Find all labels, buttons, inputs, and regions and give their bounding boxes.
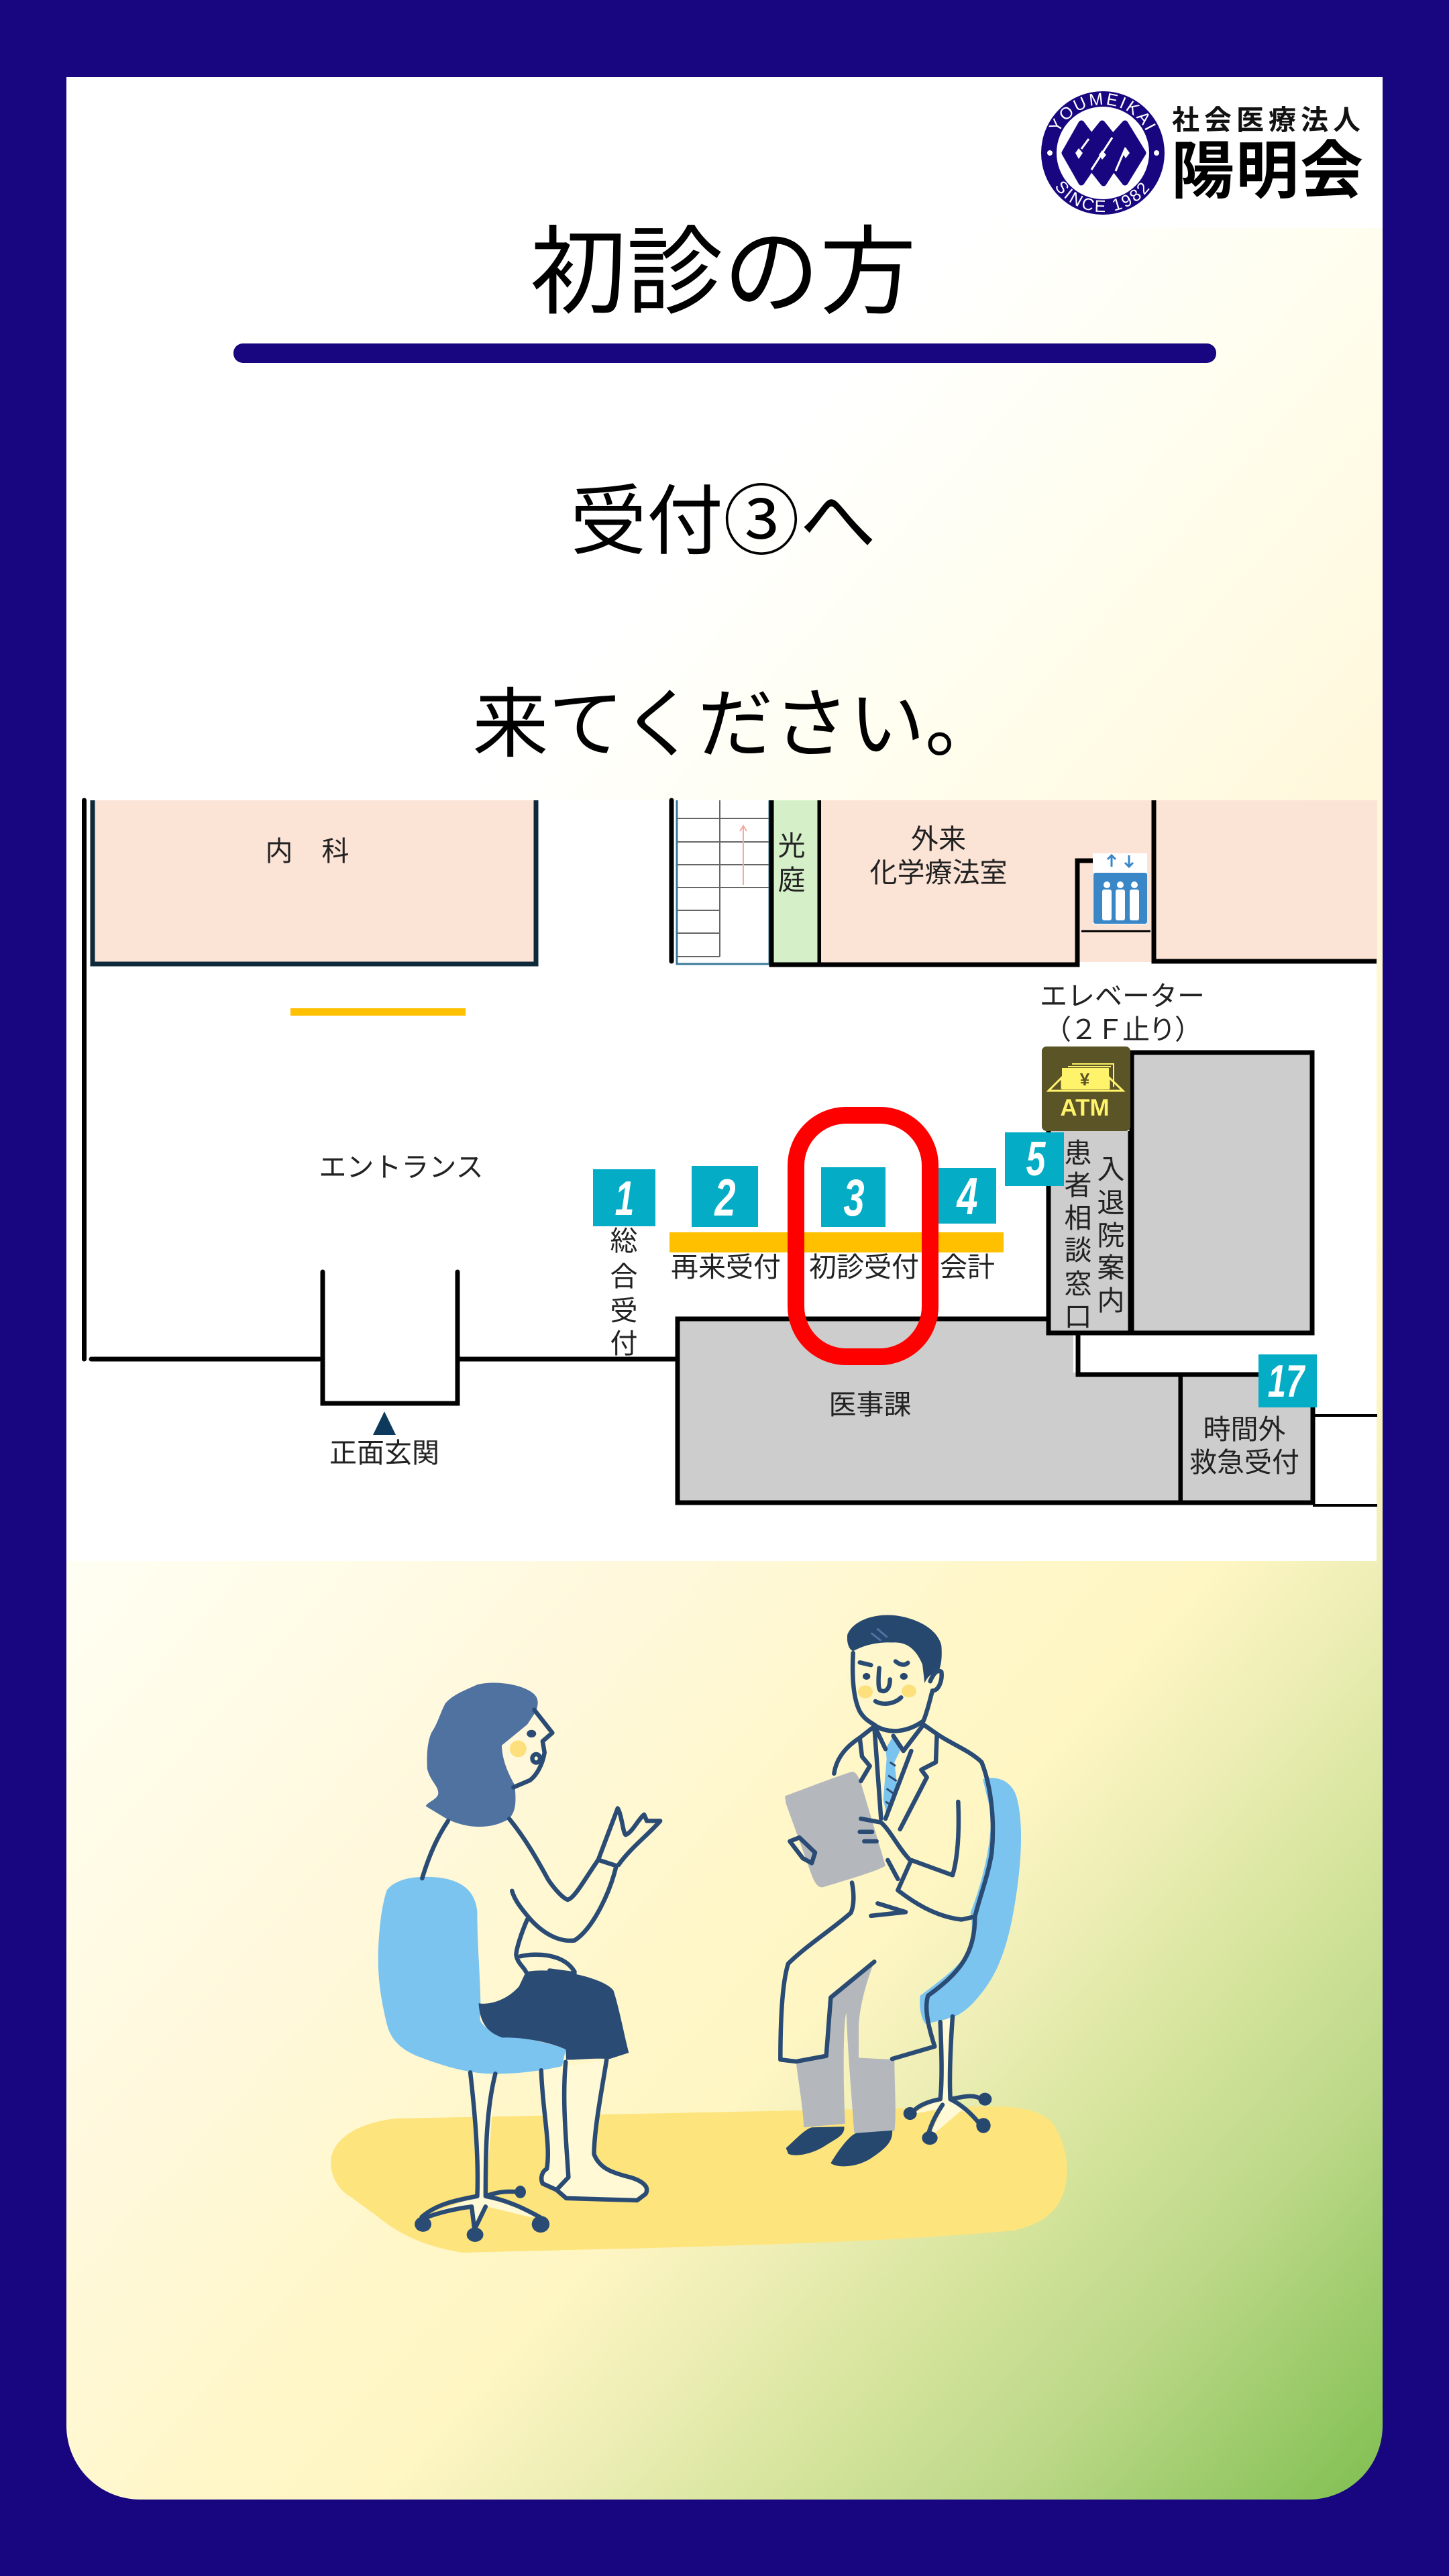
logo backing xyxy=(1006,77,1383,228)
label: 総合受付: 合 xyxy=(610,1261,637,1292)
doctor tie stripes xyxy=(885,1762,897,1805)
room: 入退院案内 / 患者相談窓口: 談 xyxy=(1064,1235,1092,1266)
label: 会計: 会計 xyxy=(940,1252,995,1283)
doctor shoes xyxy=(786,2127,892,2166)
doctor clipboard xyxy=(785,1772,885,1887)
label: 正面玄関: 正面玄関 xyxy=(329,1438,439,1468)
floor map panel xyxy=(66,800,1377,1561)
badge 3: 3 xyxy=(843,1169,865,1227)
doctor chair casters xyxy=(904,2093,991,2145)
woman outlines xyxy=(422,1710,660,2230)
doctor trousers xyxy=(796,1962,896,2133)
icon: ATM: ATM xyxy=(1060,1095,1110,1121)
woman skirt xyxy=(478,1970,629,2060)
woman cheek xyxy=(510,1740,527,1757)
label: 初診受付: 初診受付 xyxy=(809,1252,919,1283)
logo: Youmeikai xyxy=(1041,91,1365,215)
highlight: red ring around reception 3 xyxy=(796,1115,930,1356)
room: 時間外救急受付 xyxy=(678,1333,1377,1505)
room: 入退院案内 / 患者相談窓口: 窓 xyxy=(1064,1269,1092,1299)
badge 2: 2 xyxy=(714,1169,736,1227)
badge 2 xyxy=(692,1166,758,1227)
logo emblem xyxy=(1041,91,1165,215)
icon: elevator xyxy=(1093,853,1147,924)
instruction text line 2: 来てください。 xyxy=(472,682,1001,767)
room: 入退院案内 / 患者相談窓口 xyxy=(1049,1131,1130,1333)
stairs xyxy=(672,800,769,964)
room: 入退院案内 / 患者相談窓口: 口 xyxy=(1064,1301,1092,1332)
logo text: organisation type: 社会医療法人 xyxy=(1172,105,1365,136)
badge 4 xyxy=(938,1167,996,1226)
room: 入退院案内 / 患者相談窓口: 内 xyxy=(1097,1285,1124,1316)
woman chair xyxy=(378,1877,566,2074)
doctor tie xyxy=(883,1736,900,1819)
room: 光庭: 光 xyxy=(778,830,805,861)
room: 入退院案内 / 患者相談窓口: 相 xyxy=(1064,1203,1092,1234)
room: grey block xyxy=(1132,1053,1312,1333)
illustration: doctor xyxy=(780,1615,1021,2166)
badge 3 xyxy=(821,1167,885,1227)
woman hair xyxy=(426,1682,538,1827)
woman chair legs fill xyxy=(422,2072,540,2236)
label: エレベーター xyxy=(1040,981,1205,1045)
logo emblem: YOUMEIKAI xyxy=(1049,93,1156,130)
room: 入退院案内 / 患者相談窓口: 者 xyxy=(1064,1170,1092,1201)
badge 17 xyxy=(1258,1354,1317,1407)
woman legs fill xyxy=(541,2060,647,2200)
room: 外来化学療法室 and elevator hall xyxy=(820,800,1377,965)
room: 時間外救急受付: 救急受付 xyxy=(1189,1447,1299,1478)
room: 光庭 xyxy=(771,800,820,965)
icon: ATM: ¥ xyxy=(1080,1069,1090,1089)
doctor outlines xyxy=(780,1653,993,2135)
woman eye xyxy=(527,1730,536,1737)
badge 5: 5 xyxy=(1026,1132,1046,1186)
room: 医事課 xyxy=(678,1319,1187,1503)
label: エレベーター: （２Ｆ止り） xyxy=(1044,1014,1201,1045)
room: 入退院案内 / 患者相談窓口: 院 xyxy=(1097,1220,1124,1251)
label: 総合受付: 付 xyxy=(610,1328,637,1359)
room: 入退院案内 / 患者相談窓口: 入 xyxy=(1097,1154,1124,1185)
room: 内科: 科 xyxy=(322,836,349,867)
woman chair casters xyxy=(415,2186,549,2242)
room: 入退院案内 / 患者相談窓口: 退 xyxy=(1097,1187,1124,1218)
room: 時間外救急受付: 時間外 xyxy=(1203,1414,1285,1445)
logo text: name: 陽明会 xyxy=(1171,136,1364,206)
title: 初診の方 xyxy=(530,219,916,327)
instruction text line 1: 受付③へ xyxy=(570,480,876,565)
room: 入退院案内 / 患者相談窓口: 案 xyxy=(1097,1252,1124,1283)
title underline xyxy=(233,343,1216,363)
label: 総合受付: 受 xyxy=(610,1295,637,1326)
floor blob xyxy=(331,2106,1067,2253)
room: 内科: 内 xyxy=(266,836,292,867)
badge 1: 1 xyxy=(615,1172,634,1226)
label: 再来受付: 再来受付 xyxy=(671,1252,781,1283)
label: エレベーター: エレベーター xyxy=(1040,981,1205,1012)
label: 総合受付: 総 xyxy=(610,1226,637,1256)
logo emblem: SINCE 1982 xyxy=(1056,181,1150,212)
reception counter bar xyxy=(669,1232,1004,1252)
badge 1 xyxy=(593,1169,655,1226)
room: 外来化学療法室 and elevator hall: 化学療法室 xyxy=(869,857,1008,888)
badge 4: 4 xyxy=(956,1167,978,1226)
doctor eyes xyxy=(863,1673,908,1680)
illustration: woman patient xyxy=(378,1682,660,2242)
icon: entrance triangle xyxy=(373,1411,396,1435)
icon: ATM xyxy=(1042,1046,1130,1131)
walls: entrance xyxy=(85,800,677,1403)
room: 光庭: 庭 xyxy=(778,865,805,896)
yellow counter bar top xyxy=(290,1008,466,1016)
room: 内科 xyxy=(93,800,536,964)
doctor hair highlight xyxy=(871,1629,888,1641)
badge 17: 17 xyxy=(1268,1355,1306,1407)
doctor chair stem fill xyxy=(911,2017,977,2139)
room: 入退院案内 / 患者相談窓口: 患 xyxy=(1064,1138,1092,1169)
doctor hair xyxy=(847,1615,942,1683)
room: 医事課: 医事課 xyxy=(829,1389,911,1420)
doctor cheeks xyxy=(858,1684,916,1699)
badge 5 xyxy=(1005,1132,1064,1186)
label: エントランス: エントランス xyxy=(319,1152,484,1183)
room: 外来化学療法室 and elevator hall: 外来 xyxy=(911,824,966,855)
doctor chair xyxy=(920,1778,1021,2024)
